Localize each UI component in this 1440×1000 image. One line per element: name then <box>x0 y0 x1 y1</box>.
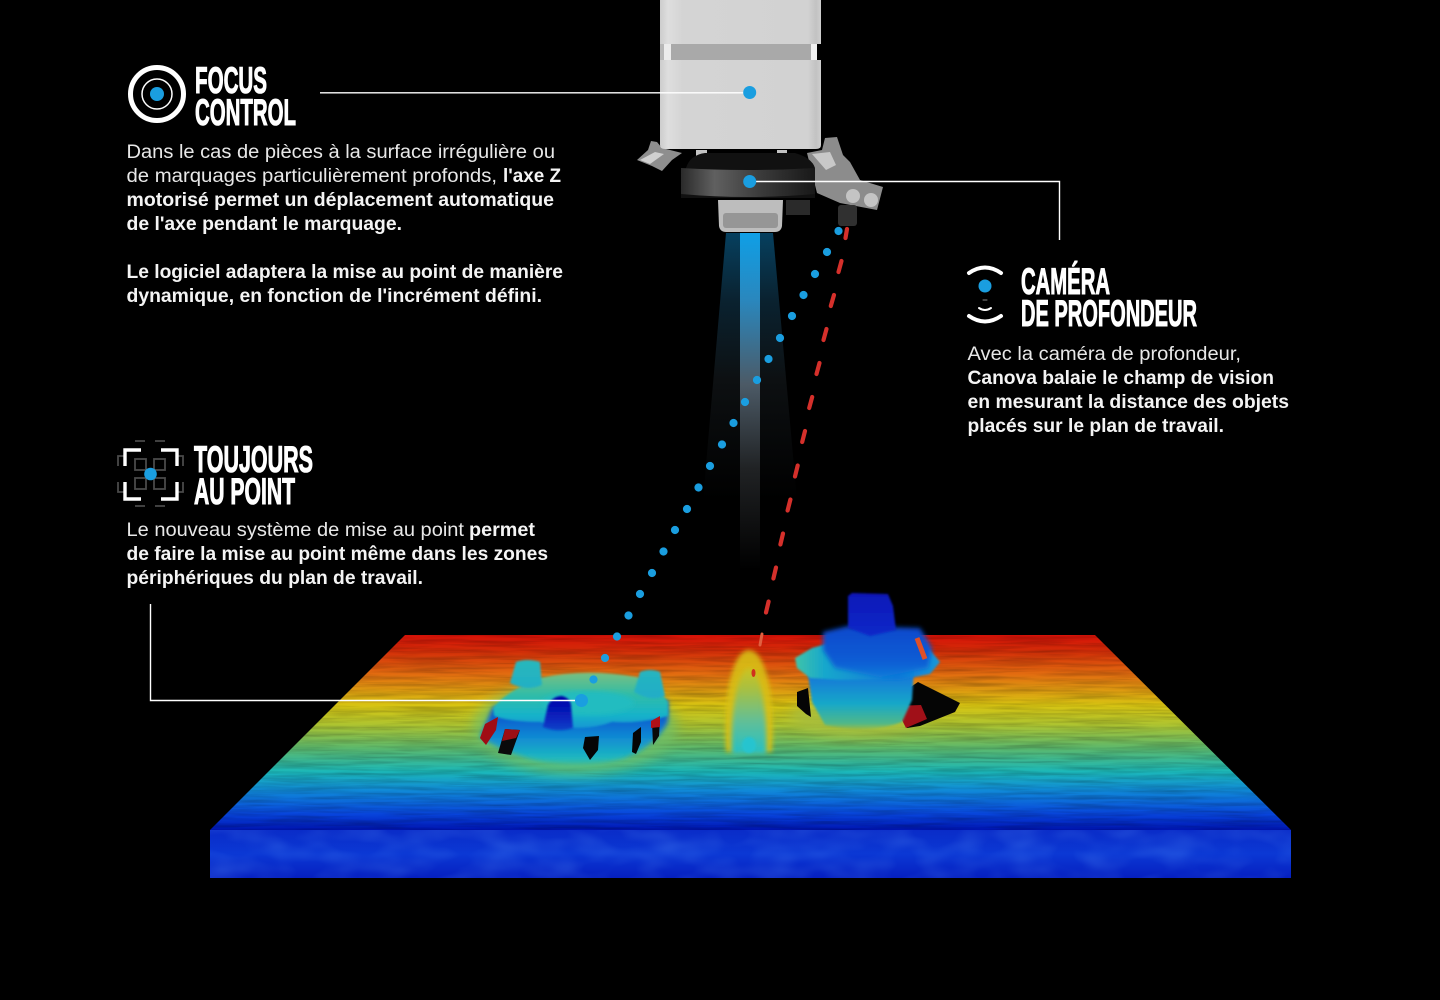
halo <box>790 696 926 736</box>
light beam <box>703 233 797 570</box>
text block: focus control <box>126 142 563 307</box>
text block: always in focus <box>126 520 548 589</box>
ring top <box>493 673 668 728</box>
text block: always in focus: Le nouveau système de mise au point <box>126 520 465 541</box>
text block: always in focus: de faire la mise au point même dans les zones <box>126 544 548 565</box>
depth map plate <box>210 635 1291 878</box>
object: toothed ring <box>473 660 677 774</box>
top block <box>848 593 896 636</box>
wide step <box>795 644 940 680</box>
icon: focus frame <box>118 441 183 506</box>
central blue post <box>543 696 573 730</box>
halo <box>473 682 677 774</box>
leader line: focus control <box>320 86 756 99</box>
red dashed laser line <box>760 229 847 645</box>
body <box>480 700 668 764</box>
heading: depth camera: CAMÉRA <box>1021 261 1110 302</box>
heading: focus control: CONTROL <box>195 92 296 133</box>
inner ring <box>542 691 634 715</box>
text block: always in focus: permet <box>469 520 536 541</box>
heading: always in focus: AU POINT <box>194 471 295 512</box>
scanner head <box>637 0 883 232</box>
text block: focus control: l'axe Z <box>503 166 561 187</box>
text block: depth camera: Canova balaie le champ de vision <box>968 368 1274 389</box>
text block: always in focus: périphériques du plan de travail. <box>126 568 423 589</box>
posts <box>510 660 542 688</box>
red mark <box>917 638 925 659</box>
heading: depth camera <box>1021 261 1197 334</box>
icon: depth camera <box>969 268 1001 322</box>
text block: focus control: dynamique, en fonction de l'incrément défini. <box>126 286 542 307</box>
text block: focus control: motorisé permet un déplacement automatique <box>126 190 554 211</box>
text block: focus control: de marquages particulièrement profonds, <box>126 166 497 187</box>
object: cylinder <box>725 650 773 754</box>
text block: focus control: de l'axe pendant le marquage. <box>126 214 402 235</box>
text block: depth camera: en mesurant la distance des objets <box>968 392 1289 413</box>
slots <box>480 717 498 745</box>
posts <box>696 150 707 165</box>
heading: always in focus <box>194 439 313 512</box>
icon: focus target <box>130 68 184 120</box>
object: stepped part <box>790 593 960 736</box>
lower body <box>807 668 914 729</box>
right bracket <box>807 137 883 210</box>
text block: depth camera <box>968 344 1289 437</box>
connector <box>838 205 857 226</box>
lens <box>718 200 783 232</box>
leader line: always in focus <box>150 604 588 707</box>
left bracket <box>637 141 682 171</box>
heading: depth camera: DE PROFONDEUR <box>1021 293 1197 334</box>
heading: focus control <box>195 60 296 133</box>
heading: focus control: FOCUS <box>195 60 267 101</box>
mid step <box>823 626 932 677</box>
blue dotted line <box>589 227 843 684</box>
black shadows <box>797 688 811 717</box>
text block: depth camera: Avec la caméra de profondeur, <box>968 344 1241 365</box>
text block: depth camera: placés sur le plan de travail. <box>968 416 1224 437</box>
leader line: depth camera <box>743 175 1060 240</box>
black ring <box>681 153 815 198</box>
text block: focus control: Le logiciel adaptera la mise au point de manière <box>126 262 563 283</box>
heading: always in focus: TOUJOURS <box>194 439 313 480</box>
body <box>660 0 821 149</box>
text block: focus control: Dans le cas de pièces à la surface irrégulière ou <box>126 142 555 163</box>
